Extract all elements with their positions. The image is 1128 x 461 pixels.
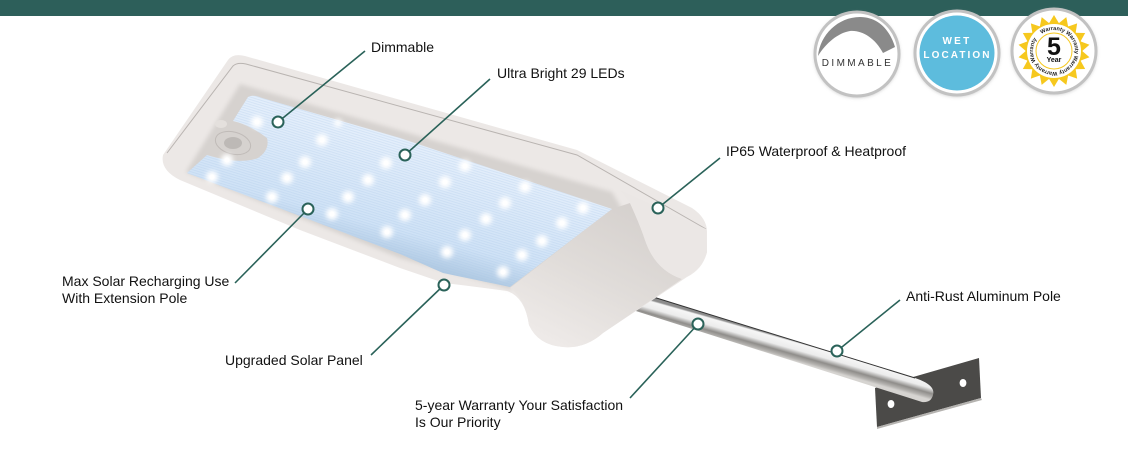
badge: wet location: LOCATION (923, 50, 992, 61)
callout: dimmable (272, 39, 434, 128)
callout: max solar recharging: Max Solar Recharging Use (62, 273, 230, 289)
callout: warranty (415, 318, 704, 430)
badge: dimmable: DIMMABLE (822, 58, 893, 69)
callout: warranty: 5-year Warranty Your Satisfaction (415, 397, 623, 413)
badge: wet location: WET (942, 36, 972, 47)
product: lamp (163, 55, 707, 347)
LED lights (206, 116, 589, 278)
callout: warranty: Is Our Priority (415, 414, 501, 430)
inner recess (186, 84, 622, 289)
callout: anti-rust pole: Anti-Rust Aluminum Pole (906, 288, 1061, 304)
mounting bracket (875, 358, 982, 429)
callout: ultra bright LEDs: Ultra Bright 29 LEDs (497, 65, 625, 81)
callout: max solar recharging (62, 204, 314, 306)
badge: 5 year warranty: 5 (1047, 33, 1061, 61)
callout: dimmable: Dimmable (371, 39, 434, 55)
end cap (620, 190, 707, 279)
product: pole and bracket (620, 290, 982, 429)
callout: max solar recharging: With Extension Pole (62, 290, 187, 306)
badge: 5 year warranty: Year (1047, 57, 1062, 64)
badge: 5 year warranty: Warranty Warranty Warranty Warranty Warranty (1030, 27, 1078, 76)
callout: upgraded solar panel: Upgraded Solar Panel (225, 352, 363, 368)
shell seam (167, 63, 706, 229)
badge: wet location (914, 11, 1000, 97)
badge: dimmable (814, 12, 900, 98)
callout: waterproof: IP65 Waterproof & Heatproof (726, 143, 906, 159)
callout: waterproof (652, 143, 906, 214)
solar panel (187, 96, 612, 287)
header band (0, 0, 1128, 16)
lamp shell (163, 55, 707, 347)
badge: 5 year warranty (1010, 8, 1098, 96)
callout: ultra bright LEDs (400, 65, 625, 160)
callout: anti-rust pole (832, 288, 1061, 356)
aluminum pole (620, 290, 933, 402)
end side surface (510, 203, 682, 347)
motion sensor (213, 120, 253, 158)
callout: upgraded solar panel (225, 280, 450, 368)
